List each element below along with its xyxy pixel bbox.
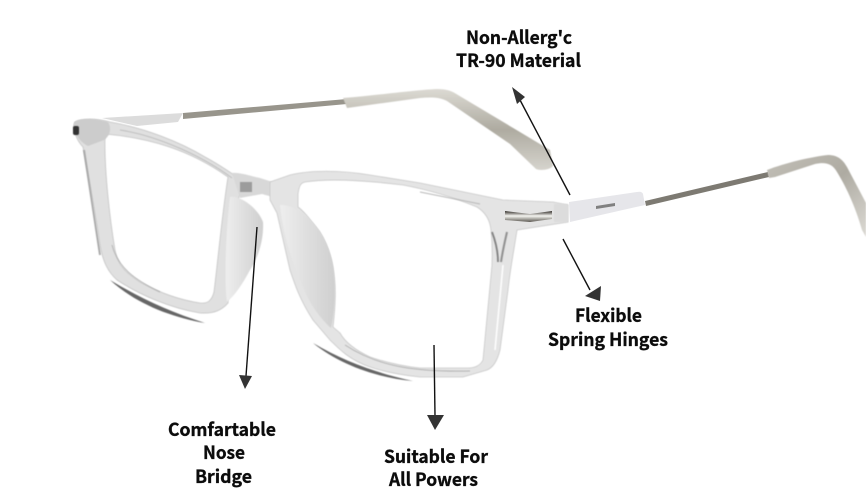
label: nose bridge: Bridge xyxy=(195,463,252,489)
arrow: nose bridge xyxy=(239,227,257,389)
front temple arm xyxy=(569,155,866,237)
left lens rim xyxy=(74,119,245,313)
metal hinge plate xyxy=(505,211,552,222)
shadows under the rims xyxy=(110,280,413,381)
label: spring hinges: Spring Hinges xyxy=(548,326,668,352)
label: material xyxy=(456,24,581,73)
label: nose bridge xyxy=(168,416,276,489)
arrow: material xyxy=(512,87,570,195)
hinge barrel xyxy=(554,204,568,222)
arrow: lens powers xyxy=(427,345,444,430)
right nose pad xyxy=(280,205,335,328)
eyeglasses xyxy=(73,89,866,381)
left hinge block xyxy=(74,119,110,146)
bridge xyxy=(232,173,290,200)
label: nose bridge: Nose xyxy=(203,439,245,465)
back temple arm xyxy=(102,89,553,170)
label: lens powers xyxy=(384,443,488,492)
label: nose bridge: Comfartable xyxy=(168,416,276,442)
left hinge screw xyxy=(73,126,79,135)
label: spring hinges xyxy=(548,302,668,352)
label: lens powers: Suitable For xyxy=(384,443,488,469)
rim highlights xyxy=(84,130,507,371)
arrow: spring hinges xyxy=(563,239,601,301)
label: material: TR-90 Material xyxy=(456,47,581,73)
right lens rim xyxy=(270,171,568,377)
left nose pad xyxy=(226,197,263,302)
label: material: Non-Allerg'c xyxy=(466,24,572,50)
label: spring hinges: Flexible xyxy=(575,302,642,328)
label: lens powers: All Powers xyxy=(388,466,478,492)
